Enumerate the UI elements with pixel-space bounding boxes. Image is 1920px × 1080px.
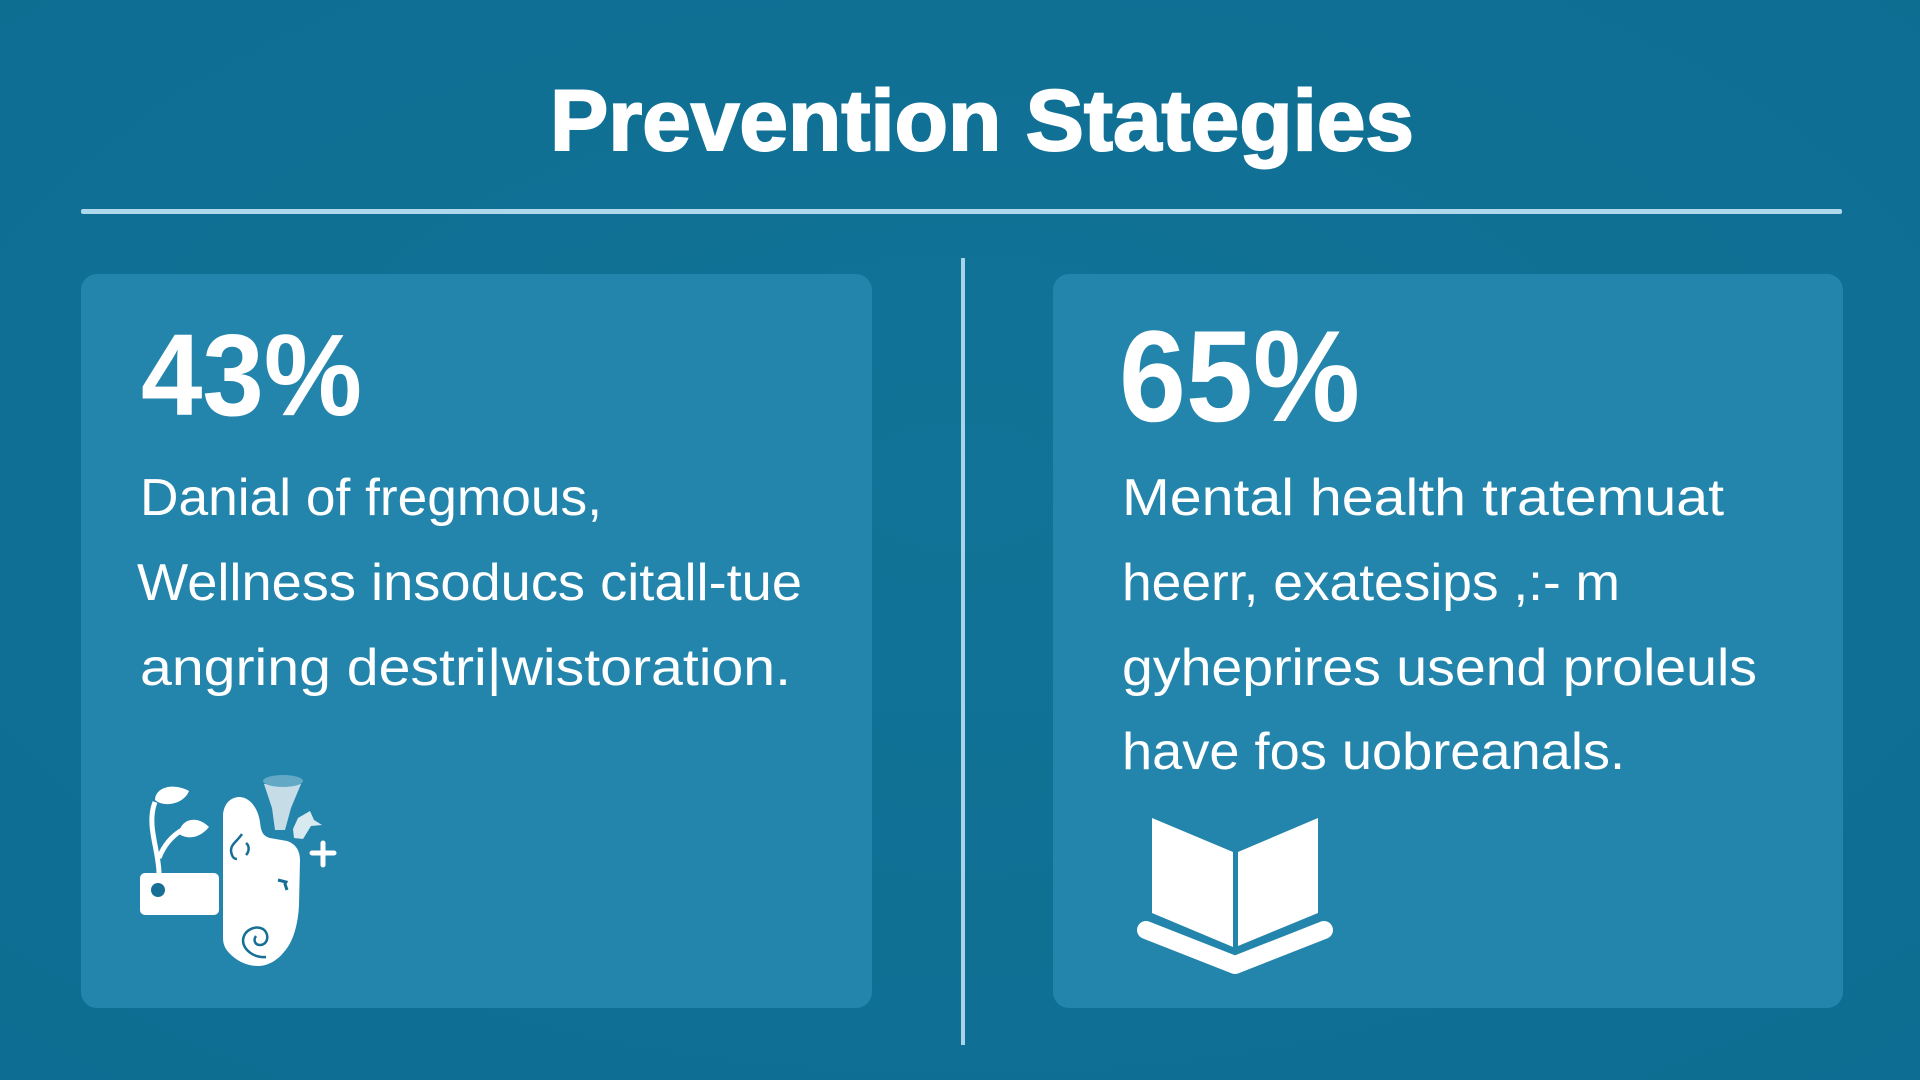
title: Prevention Stategies: [550, 73, 1414, 169]
text block: right description: Mental health tratemuat: [1122, 469, 1725, 527]
stat: 65%: 65%: [1119, 303, 1360, 449]
text block: left description: [137, 469, 802, 697]
text block: left description: Danial of fregmous,: [140, 469, 602, 527]
title rule: [81, 209, 1842, 214]
centre divider: [961, 258, 965, 1045]
text block: right description: [1122, 469, 1757, 781]
text block: left description: angring destri|wistoration.: [140, 639, 791, 697]
icon: wellness products: [140, 775, 334, 966]
panel: right statistic: [1053, 274, 1843, 1008]
text block: left description: Wellness insoducs citall-tue: [137, 554, 802, 612]
icon: open book: [1146, 818, 1324, 965]
stat: 43%: 43%: [141, 310, 362, 440]
text block: right description: gyheprires usend proleuls: [1122, 639, 1757, 697]
text block: right description: have fos uobreanals.: [1122, 723, 1625, 781]
panel: left statistic: [81, 274, 872, 1008]
text block: right description: heerr, exatesips ,:- m: [1122, 554, 1620, 612]
